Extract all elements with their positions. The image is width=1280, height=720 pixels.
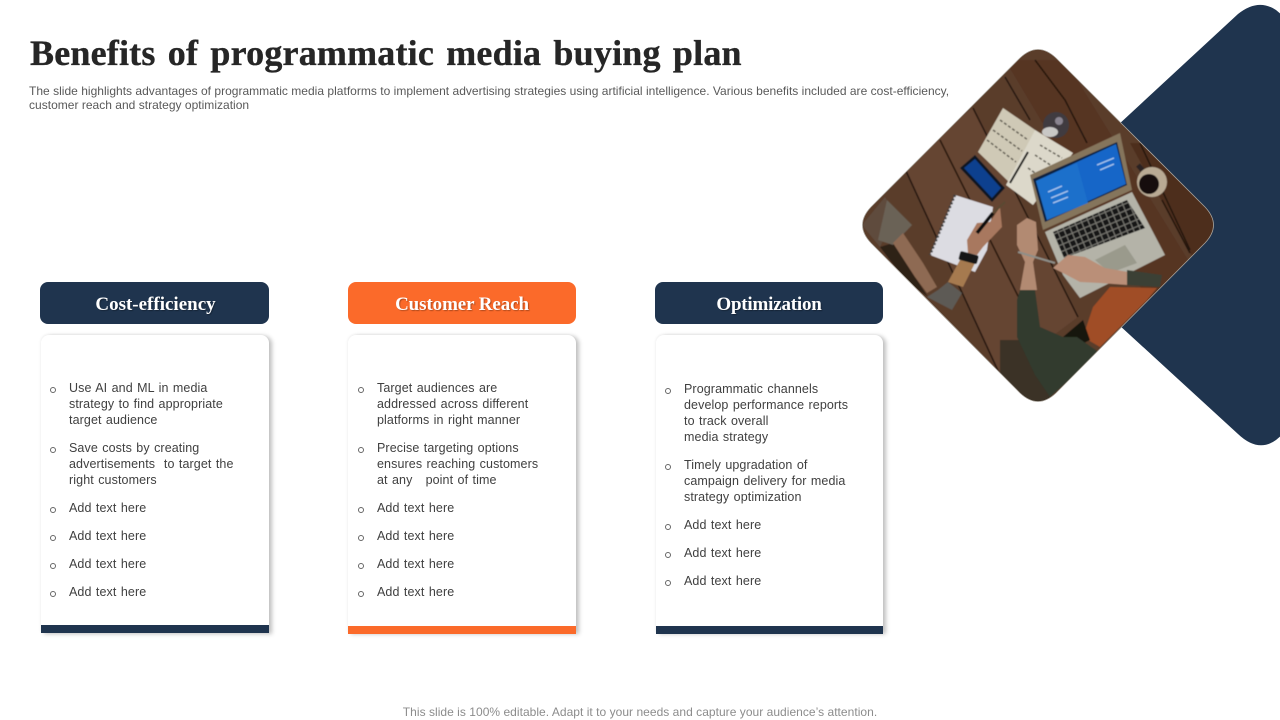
list: Cost-efficiency: Add text here <box>69 500 146 514</box>
list: Customer Reach: at any point of time <box>377 472 497 486</box>
list: Customer Reach: addressed across different <box>377 396 528 410</box>
list: Optimization: Timely upgradation of <box>684 458 807 472</box>
list: Customer Reach: Add text here <box>377 556 454 570</box>
list: Optimization: media strategy <box>684 430 768 444</box>
header: Customer Reach <box>348 282 576 324</box>
list: Cost-efficiency: Use AI and ML in media <box>69 380 207 394</box>
list: Customer Reach <box>358 380 538 598</box>
phone <box>960 155 1005 202</box>
panel: Customer Reach <box>348 335 576 633</box>
person: bare arm with stylus <box>1017 218 1055 290</box>
list: Optimization <box>665 382 848 588</box>
laptop lid and screen <box>1030 133 1132 230</box>
list: Optimization: to track overall <box>684 414 768 428</box>
panel: Cost-efficiency <box>41 335 269 633</box>
list: Cost-efficiency: target audience <box>69 412 157 426</box>
list: Optimization: strategy optimization <box>684 490 802 504</box>
panel accent bar <box>348 626 576 634</box>
list: Cost-efficiency: strategy to find appropriate <box>69 396 223 410</box>
subtitle description: The slide highlights advantages of programmatic media platforms to implement advertising strategies using artificial intelligence. Various benefits included are cost-efficiency, <box>29 84 949 98</box>
list: Customer Reach: platforms in right manner <box>377 412 520 426</box>
list: Customer Reach: Add text here <box>377 528 454 542</box>
header: Cost-efficiency <box>40 282 269 324</box>
list: Optimization: campaign delivery for media <box>684 474 845 488</box>
open notebook <box>978 108 1073 205</box>
footer note: This slide is 100% editable. Adapt it to your needs and capture your audience’s attention. <box>403 705 877 719</box>
list: Optimization: Add text here <box>684 574 761 588</box>
list: Optimization: Add text here <box>684 546 761 560</box>
person: hand with pen and watch <box>927 202 1005 310</box>
title: Benefits of programmatic media buying plan <box>30 33 742 73</box>
list: Customer Reach: Precise targeting options <box>377 440 519 454</box>
ornament <box>1042 112 1069 138</box>
list: Cost-efficiency: Add text here <box>69 528 146 542</box>
hand on laptop and sleeve <box>1053 255 1162 287</box>
header: Cost-efficiency: Cost-efficiency <box>95 294 216 315</box>
list: Cost-efficiency: Add text here <box>69 584 146 598</box>
header: Optimization: Optimization <box>716 294 822 315</box>
subtitle description: customer reach and strategy optimization <box>29 98 249 112</box>
list: Cost-efficiency: advertisements to target the <box>69 456 234 470</box>
list: Cost-efficiency: Add text here <box>69 556 146 570</box>
subtitle description <box>29 84 949 112</box>
coffee cup <box>1137 165 1167 197</box>
laptop base <box>1045 192 1165 298</box>
list: Cost-efficiency: Save costs by creating <box>69 440 199 454</box>
list: Cost-efficiency <box>50 380 234 598</box>
list: Cost-efficiency: right customers <box>69 472 157 486</box>
list: Optimization: Programmatic channels <box>684 382 818 396</box>
redhead: green sweater <box>1017 290 1100 397</box>
panel accent bar <box>41 625 269 633</box>
photo: team working around laptop on wooden table <box>862 49 1214 402</box>
list: Customer Reach: Add text here <box>377 500 454 514</box>
redhead: hair <box>1083 287 1157 347</box>
header: Optimization <box>655 282 883 324</box>
wood table <box>862 50 1213 402</box>
header: Customer Reach: Customer Reach <box>395 294 529 315</box>
panel accent bar <box>656 626 883 634</box>
list: Optimization: Add text here <box>684 518 761 532</box>
far-left person: sleeve, hair and arm <box>862 197 937 297</box>
list: Optimization: develop performance reports <box>684 398 848 412</box>
list: Customer Reach: ensures reaching customers <box>377 456 538 470</box>
list: Customer Reach: Add text here <box>377 584 454 598</box>
panel: Optimization <box>656 335 883 633</box>
notepad <box>930 195 993 272</box>
list: Customer Reach: Target audiences are <box>377 380 497 394</box>
